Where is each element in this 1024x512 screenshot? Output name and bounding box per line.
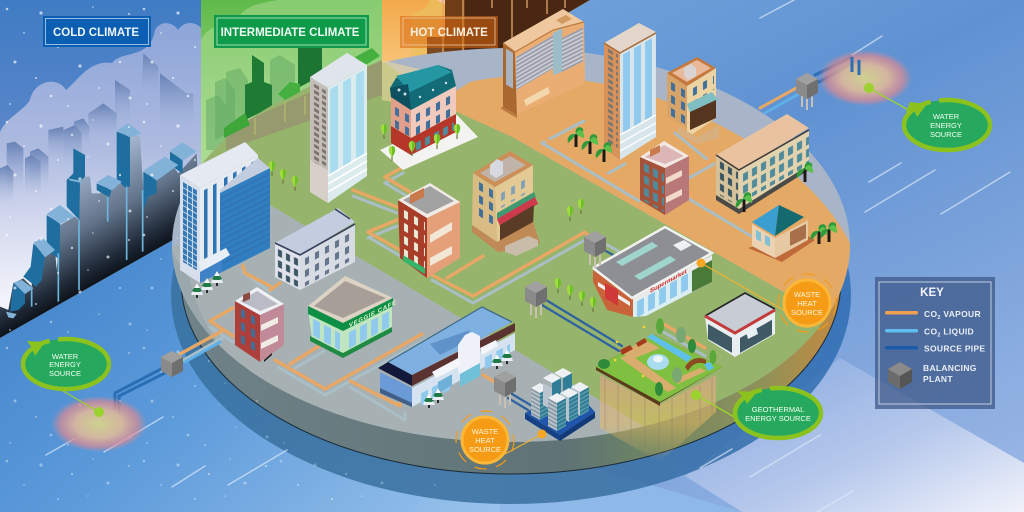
key: liquid: LIQUID (941, 326, 974, 336)
label: cold climate (43, 16, 151, 47)
callout: waste heat source bottom: WASTE (472, 427, 498, 436)
key: balancing plant (888, 362, 977, 389)
pipes: liquid return (180, 121, 751, 420)
callout: geothermal energy source: GEOTHERMAL (752, 405, 804, 414)
building: red mansard (390, 65, 456, 155)
building: tan-blue tower (604, 23, 656, 160)
key: vapour (885, 309, 981, 321)
roofs (6, 123, 197, 318)
key: balancing plant: PLANT (923, 374, 953, 384)
callout: waste heat source bottom (456, 411, 546, 469)
label: intermediate climate (214, 15, 369, 48)
panel: cold climate backdrop (0, 0, 201, 343)
building: tan cafe (472, 151, 540, 256)
key: vapour: CO (924, 309, 937, 319)
disc: top surface (165, 48, 852, 460)
disc: base layer (171, 86, 851, 504)
pipes (115, 57, 859, 420)
key: balancing plant: BALANCING (923, 363, 977, 373)
building: tan hotel (500, 9, 585, 118)
building: tan right (667, 57, 719, 144)
callout: right water energy source: ENERGY (930, 121, 962, 130)
key: vapour: 2 (937, 315, 941, 321)
park (596, 318, 722, 406)
callout: waste heat source bottom: SOURCE (469, 445, 501, 454)
key (875, 277, 995, 409)
building: gray office (275, 208, 355, 290)
trees: snow (191, 271, 513, 408)
building: blue tower (180, 142, 270, 283)
park: stream (647, 334, 692, 362)
wall: intermediate climate city rim (224, 48, 455, 150)
shop: roof (388, 307, 512, 375)
trees: lime (269, 124, 596, 312)
ground loops under park (600, 375, 716, 462)
building: shop front (378, 307, 515, 407)
callout: right water energy source (818, 50, 990, 150)
callout: waste heat source right (696, 258, 836, 332)
front mass (0, 133, 200, 343)
key: liquid: CO (924, 326, 937, 336)
skyline (0, 53, 200, 343)
back skyline (0, 53, 193, 203)
balancing plants (161, 73, 818, 408)
building: long right (716, 114, 809, 214)
text: supermarket sign: Supermarket (650, 268, 687, 295)
snow overlay (0, 0, 460, 512)
label: cold climate: COLD CLIMATE (53, 27, 139, 39)
callout: waste heat source bottom: HEAT (475, 436, 495, 445)
park: paths (622, 340, 660, 360)
callout: left water energy source: WATER (52, 352, 79, 361)
building: red brick (398, 183, 460, 278)
label: hot climate: HOT CLIMATE (410, 27, 488, 39)
panel: hot climate backdrop (382, 0, 590, 63)
building: mauve left (235, 287, 284, 362)
building: teal roof house (748, 205, 815, 262)
callout: right water energy source: WATER (933, 112, 960, 121)
building: central tower (310, 53, 367, 203)
label: hot climate (400, 16, 498, 48)
building: supermarket (593, 227, 712, 318)
drips (32, 187, 143, 307)
callout: left water energy source (23, 339, 147, 452)
towers (531, 368, 589, 431)
callout: geothermal energy source: ENERGY SOURCE (745, 414, 811, 423)
callout: geothermal energy source (691, 388, 821, 438)
key: source pipe: SOURCE PIPE (924, 344, 985, 354)
shop: walls (380, 372, 412, 407)
building: brick right (640, 141, 689, 215)
callout: right water energy source: SOURCE (930, 130, 962, 139)
callout: waste heat source right: SOURCE (791, 308, 823, 317)
building: data centre (525, 368, 595, 441)
callout: left water energy source: SOURCE (49, 369, 81, 378)
callout: waste heat source right: WASTE (794, 290, 820, 299)
text: veggie cafe sign: VEGGIE CAFE (349, 299, 397, 329)
building: small store (705, 293, 775, 357)
pipes: plants tail (760, 86, 800, 108)
callout: waste heat source right: HEAT (797, 299, 817, 308)
clouds (0, 23, 201, 340)
shop: entrance (458, 332, 480, 382)
panel: intermediate climate backdrop (201, 0, 382, 164)
building: veggie cafe (308, 276, 397, 358)
trees (191, 124, 837, 408)
trees: palms (568, 127, 837, 244)
building: white plaza (380, 115, 478, 170)
key: vapour: VAPOUR (941, 309, 981, 319)
callout: left water energy source: ENERGY (49, 360, 81, 369)
key: liquid: 2 (937, 332, 941, 338)
teal faces (10, 132, 183, 312)
key: liquid (885, 326, 974, 338)
pipes: vapour (180, 115, 751, 406)
key: KEY (920, 287, 944, 299)
label: intermediate climate: INTERMEDIATE CLIMATE (221, 27, 360, 39)
